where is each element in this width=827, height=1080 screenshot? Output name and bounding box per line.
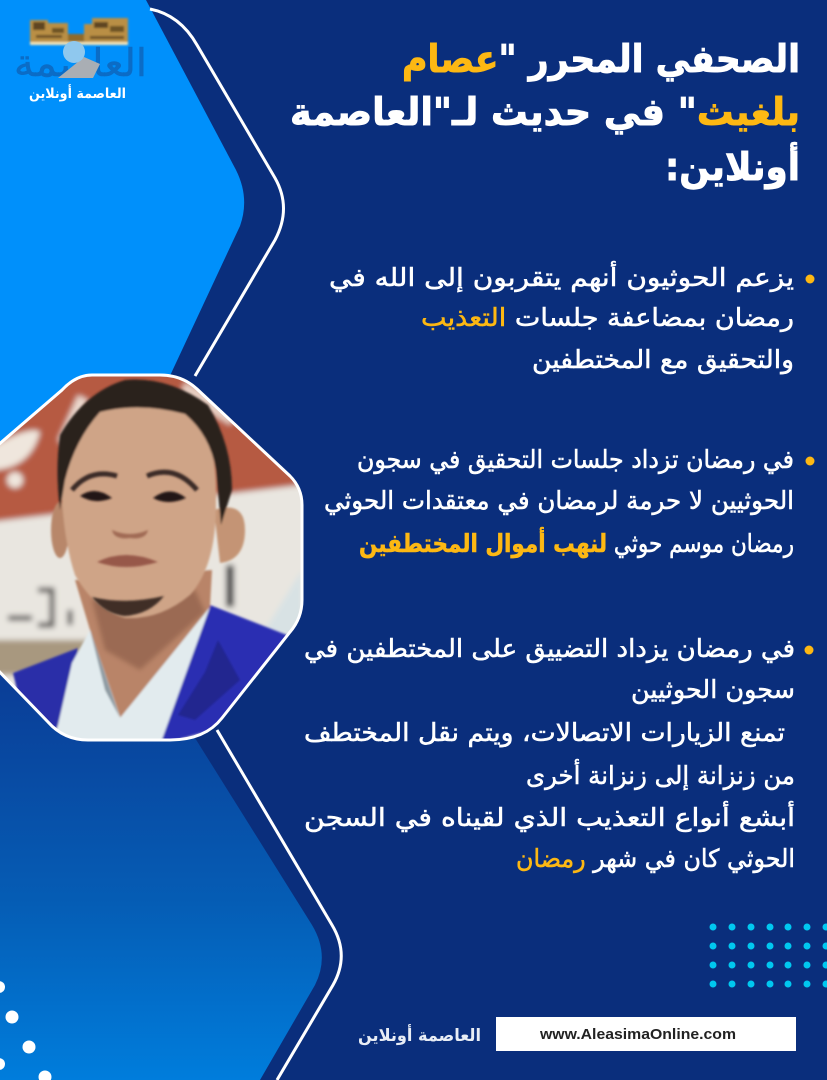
title	[290, 37, 800, 190]
cyan dot grid	[710, 924, 827, 988]
panel: lower blue hexagon	[0, 660, 322, 1080]
white outline lower	[217, 730, 341, 1080]
photo clip	[0, 370, 310, 750]
panel: light blue hexagon	[0, 0, 244, 450]
logo	[14, 18, 147, 102]
bullet	[806, 456, 814, 466]
text block: point two: الحوثيين لا حرمة لرمضان في معتقدات الحوثي	[324, 486, 794, 515]
footer url box	[496, 1017, 796, 1051]
text block: point three: سجون الحوثيين	[631, 675, 795, 704]
text block: point one: يزعم الحوثيون أنهم يتقربون إلى الله في	[329, 260, 794, 293]
text block: point two: في رمضان تزداد جلسات التحقيق في سجون	[357, 445, 794, 474]
text block: point three: أبشع أنواع التعذيب الذي لقيناه في السجن	[304, 800, 795, 833]
logo: buildings	[30, 18, 128, 45]
text block: point three: تمنع الزيارات الاتصالات، ويتم نقل المختطف	[304, 718, 785, 748]
footer url box: www.AleasimaOnline.com	[539, 1026, 736, 1043]
title: الصحفي المحرر "عصام	[402, 37, 800, 82]
logo: caption: العاصمة أونلاين	[29, 84, 126, 102]
logo: emblem	[58, 41, 100, 78]
text block: point two: رمضان موسم حوثي لنهب أموال المختطفين	[359, 527, 794, 559]
photo head	[51, 380, 245, 618]
photo frame	[0, 375, 302, 740]
text block: point two	[324, 445, 814, 559]
logo: wordmark: العاصمة	[14, 41, 147, 85]
text block: point three: الحوثي كان في شهر رمضان	[516, 844, 795, 874]
portrait photo	[0, 370, 827, 1080]
text block: point three: من زنزانة إلى زنزانة أخرى	[526, 758, 795, 791]
text block: point one	[329, 260, 814, 375]
photo backdrop	[0, 370, 310, 750]
text block: point one: رمضان بمضاعفة جلسات التعذيب	[421, 303, 794, 332]
title: أونلاين:	[665, 142, 800, 190]
text block: point three	[304, 634, 814, 874]
text block: point three: في رمضان يزداد التضييق على المختطفين في	[304, 634, 795, 663]
bullet	[806, 274, 814, 284]
bullet	[804, 646, 814, 654]
white dots	[0, 981, 52, 1080]
text block: point one: والتحقيق مع المختطفين	[532, 345, 794, 375]
photo face	[72, 472, 197, 616]
title: بلغيث" في حديث لـ"العاصمة	[290, 90, 800, 134]
footer brand name: العاصمة أونلاين	[358, 1024, 481, 1046]
photo body	[13, 570, 292, 745]
white outline upper	[150, 9, 284, 376]
